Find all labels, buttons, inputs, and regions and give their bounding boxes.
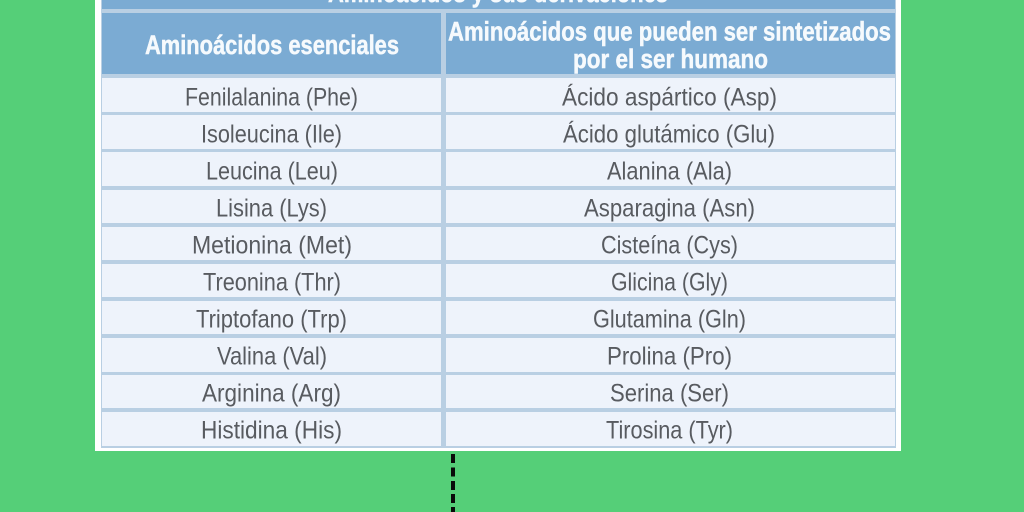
synthesizable amino acid names: Asparagina (Asn): [584, 194, 755, 222]
synthesizable amino acid names: Serina (Ser): [610, 380, 729, 408]
essential amino acid names: Lisina (Lys): [216, 194, 327, 222]
synthesizable amino acid names: Glicina (Gly): [611, 268, 728, 296]
column header: essential amino acids: Aminoácidos esenciales: [145, 30, 399, 60]
synthesizable amino acid names: Alanina (Ala): [607, 158, 732, 186]
synthesizable amino acid names: [562, 82, 777, 444]
column header: amino acids synthesized by humans: [446, 13, 895, 74]
essential amino acid names: Isoleucina (Ile): [201, 120, 342, 148]
dashed connector line: [451, 454, 455, 512]
synthesizable amino acid names: Tirosina (Tyr): [606, 416, 733, 444]
essential amino acid names: Arginina (Arg): [202, 380, 341, 408]
table panel: amino acids: [95, 0, 901, 451]
essential amino acid names: Treonina (Thr): [203, 268, 341, 296]
table rows: [102, 78, 895, 446]
synthesizable amino acid names: Ácido glutámico (Glu): [563, 120, 775, 148]
synthesizable amino acid names: Cisteína (Cys): [601, 232, 738, 260]
column header: amino acids synthesized by humans: por el ser humano: [573, 44, 768, 74]
column header: amino acids synthesized by humans: Aminoácidos que pueden ser sintetizados: [448, 16, 891, 46]
essential amino acid names: Valina (Val): [217, 342, 327, 370]
title bar: [102, 0, 895, 9]
essential amino acid names: Histidina (His): [201, 416, 342, 444]
essential amino acid names: Triptofano (Trp): [196, 306, 347, 334]
essential amino acid names: Fenilalanina (Phe): [185, 84, 358, 112]
synthesizable amino acid names: Prolina (Pro): [607, 342, 732, 370]
essential amino acid names: [185, 84, 358, 444]
essential amino acid names: Metionina (Met): [192, 232, 352, 260]
essential amino acid names: Leucina (Leu): [206, 158, 338, 186]
column header: essential amino acids: [102, 13, 441, 74]
synthesizable amino acid names: Glutamina (Gln): [593, 306, 746, 334]
synthesizable amino acid names: Ácido aspártico (Asp): [562, 82, 777, 112]
